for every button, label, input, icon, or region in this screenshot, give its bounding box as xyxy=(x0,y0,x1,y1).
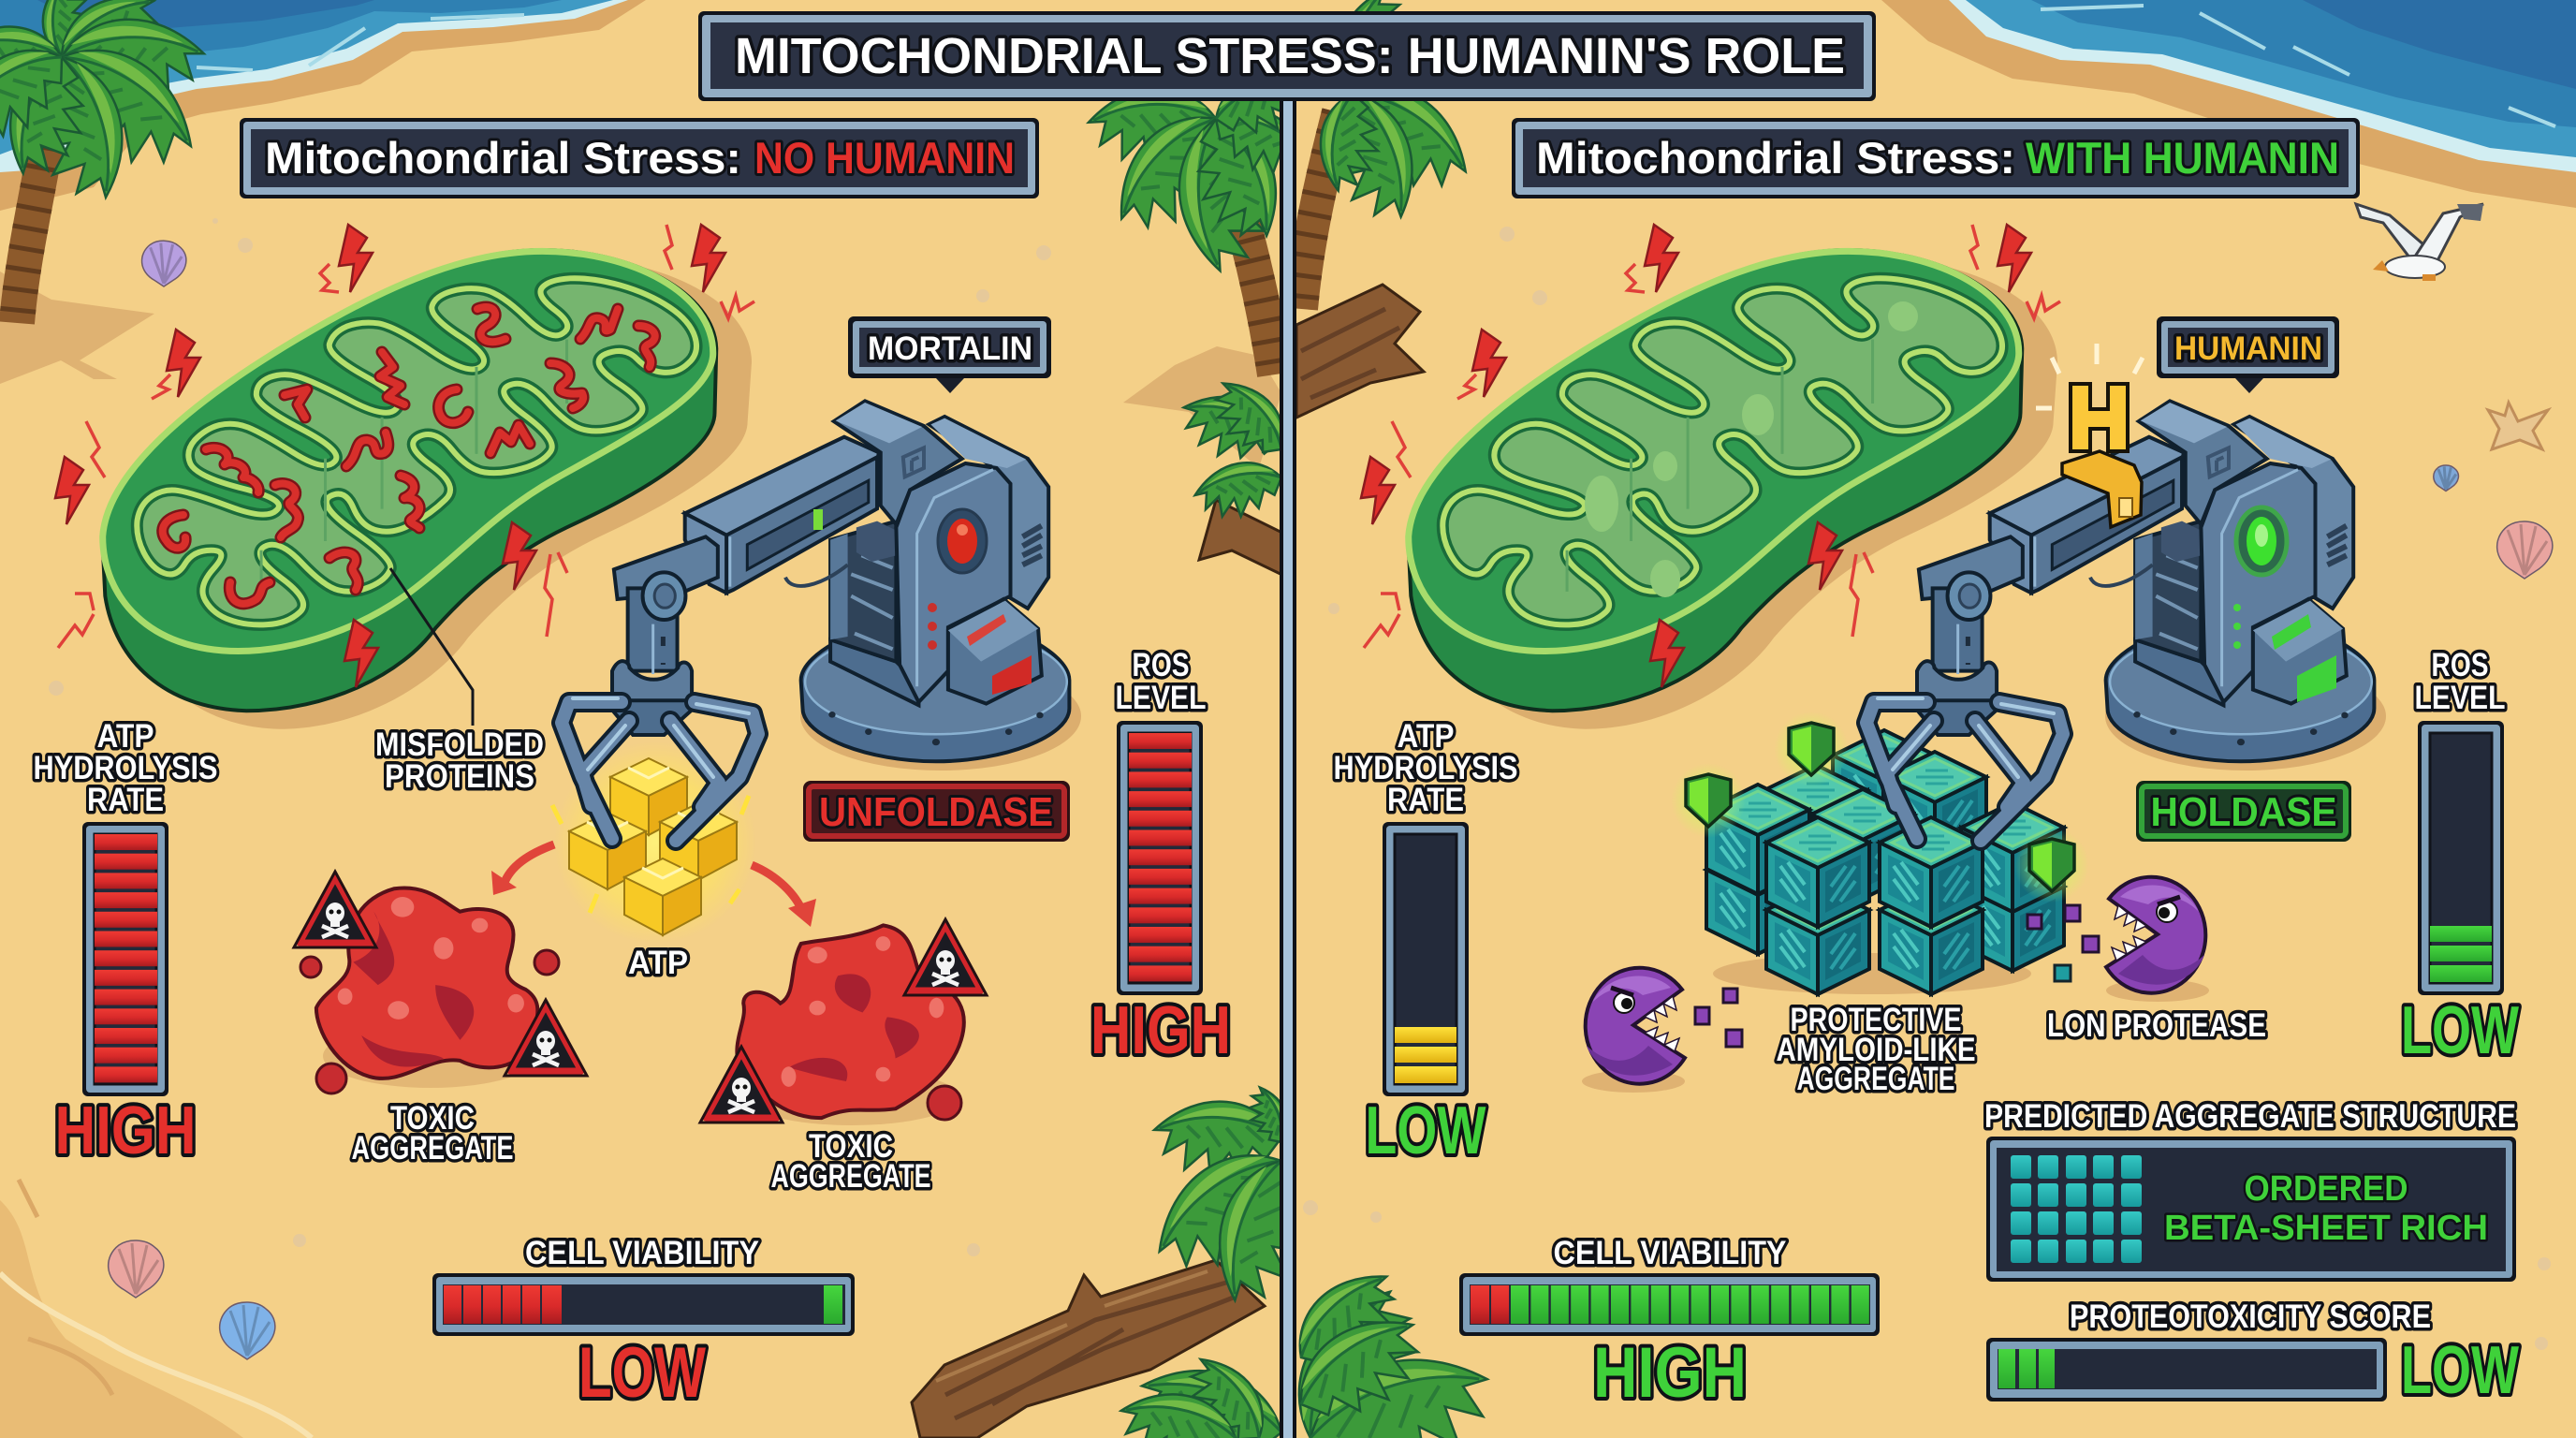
meter: ROS level left: HIGH xyxy=(1090,993,1231,1068)
meter: ATP hydrolysis right: ATP xyxy=(1397,718,1455,755)
gauge: cell viability high: HIGH xyxy=(1593,1333,1747,1413)
robot arm: humanin xyxy=(1866,401,2386,841)
palm tree: top left xyxy=(0,0,214,323)
shells and starfish xyxy=(109,241,2553,1359)
label: misfolded proteins: MISFOLDED xyxy=(375,726,544,763)
red lens xyxy=(813,509,1032,695)
panel divider xyxy=(1280,94,1296,1438)
protective shields xyxy=(1671,712,2089,902)
green lens xyxy=(2233,507,2336,702)
curved arrows to aggregates xyxy=(491,844,816,927)
label: protective amyloid-like aggregate: AMYLOID-LIKE xyxy=(1777,1032,1975,1068)
label: protective amyloid-like aggregate: PROTECTIVE xyxy=(1790,1002,1962,1038)
subtitle: no humanin xyxy=(240,118,1039,198)
beta-sheet grid icon xyxy=(2011,1155,2142,1263)
label: misfolded proteins: PROTEINS xyxy=(385,758,534,795)
meter: ROS level right: LEVEL xyxy=(2415,680,2505,716)
palm tree: centre right xyxy=(1301,0,1486,309)
label: ATP: ATP xyxy=(628,945,688,981)
seagull xyxy=(2356,204,2483,281)
palm tree: centre left xyxy=(1086,101,1280,377)
meter: ATP hydrolysis right xyxy=(1333,718,1518,1168)
misfolded proteins leader line xyxy=(390,568,473,726)
subtitle: with humanin: Mitochondrial Stress: xyxy=(1536,133,2015,183)
label: protective amyloid-like aggregate: AGGREGATE xyxy=(1797,1061,1954,1097)
meter: ATP hydrolysis right: RATE xyxy=(1387,782,1464,818)
gauge: cell viability low: LOW xyxy=(578,1333,706,1413)
meter: ROS level right xyxy=(2401,647,2519,1068)
label: toxic aggregate left: AGGREGATE xyxy=(352,1130,513,1167)
ocean: right xyxy=(1881,0,2576,208)
subtitle: with humanin xyxy=(1512,118,2360,198)
toxic aggregate: left xyxy=(294,872,587,1093)
panel: predicted aggregate structure: BETA-SHEET RICH xyxy=(2164,1209,2488,1248)
meter: ROS level right: LOW xyxy=(2401,993,2519,1068)
label: toxic aggregate right xyxy=(771,1128,930,1195)
meter: ATP hydrolysis left xyxy=(34,718,217,1168)
gauge: cell viability low xyxy=(432,1235,855,1413)
label: mortalin: MORTALIN xyxy=(868,330,1032,367)
label: humanin: HUMANIN xyxy=(2174,330,2322,367)
subtitle: no humanin: NO HUMANIN xyxy=(754,133,1015,183)
subtitle: no humanin: Mitochondrial Stress: xyxy=(265,133,741,183)
gauge: proteotoxicity score: PROTEOTOXICITY SCORE xyxy=(2070,1299,2431,1335)
ATP cubes with glow xyxy=(552,741,756,944)
toxic aggregate: right xyxy=(700,919,987,1125)
driftwood: bottom left panel xyxy=(912,1260,1265,1438)
sand specks xyxy=(49,218,2551,1350)
meter: ATP hydrolysis left: RATE xyxy=(87,782,164,818)
gauge: proteotoxicity score xyxy=(1986,1299,2519,1408)
label: toxic aggregate left: TOXIC xyxy=(390,1100,475,1137)
palm shadows xyxy=(0,271,2270,468)
fern: bottom right panel xyxy=(1297,1275,1490,1438)
lon protease: left xyxy=(1582,968,1742,1093)
holdase badge: HOLDASE xyxy=(2151,789,2336,835)
protective amyloid-like aggregate cubes xyxy=(1706,730,2064,994)
meter: ATP hydrolysis left: HYDROLYSIS xyxy=(34,750,217,786)
fern: centre left xyxy=(1181,382,1280,520)
title banner xyxy=(698,11,1876,101)
driftwood: centre xyxy=(1199,285,1424,578)
meter: ROS level left: LEVEL xyxy=(1116,680,1206,716)
lon protease: right xyxy=(2027,877,2209,1002)
gauge: proteotoxicity score: LOW xyxy=(2401,1333,2519,1408)
label: misfolded proteins xyxy=(375,726,544,795)
meter: ATP hydrolysis right: LOW xyxy=(1365,1093,1486,1168)
subtitle: with humanin: WITH HUMANIN xyxy=(2026,133,2339,183)
label: toxic aggregate right: TOXIC xyxy=(809,1128,893,1165)
unfoldase badge: UNFOLDASE xyxy=(819,789,1053,835)
panel: predicted aggregate structure: ORDERED xyxy=(2245,1169,2408,1209)
meter: ROS level left: ROS xyxy=(1133,647,1189,683)
meter: ATP hydrolysis left: ATP xyxy=(97,718,154,755)
meter: ATP hydrolysis left: HIGH xyxy=(54,1093,197,1168)
panel: predicted aggregate structure xyxy=(1984,1098,2516,1282)
gauge: cell viability low: CELL VIABILITY xyxy=(525,1235,759,1271)
unfoldase badge xyxy=(803,781,1070,842)
gauge: cell viability high: CELL VIABILITY xyxy=(1554,1235,1786,1271)
ocean: left xyxy=(0,0,646,211)
meter: ATP hydrolysis right: HYDROLYSIS xyxy=(1333,750,1518,786)
label: protective amyloid-like aggregate xyxy=(1777,1002,1975,1097)
misfolded proteins xyxy=(163,307,655,604)
label: mortalin xyxy=(848,316,1051,393)
label: lon protease: LON PROTEASE xyxy=(2047,1007,2266,1044)
gauge: cell viability high xyxy=(1459,1235,1880,1413)
meter: ROS level left xyxy=(1090,647,1231,1068)
robot arm: mortalin xyxy=(562,401,1081,841)
meter: ROS level right: ROS xyxy=(2432,647,2488,683)
label: humanin xyxy=(2157,316,2339,393)
label: toxic aggregate left xyxy=(352,1100,513,1167)
label: toxic aggregate right: AGGREGATE xyxy=(771,1158,930,1195)
mitochondrion base: with humanin xyxy=(1361,225,2060,729)
mitochondrion base: no humanin xyxy=(55,225,754,729)
title banner: MITOCHONDRIAL STRESS: HUMANIN'S ROLE xyxy=(735,28,1845,84)
humanin molecule xyxy=(2036,344,2143,527)
palm fronds: bottom left panel xyxy=(1118,1085,1280,1438)
beach shading bottom-left xyxy=(0,1180,312,1438)
